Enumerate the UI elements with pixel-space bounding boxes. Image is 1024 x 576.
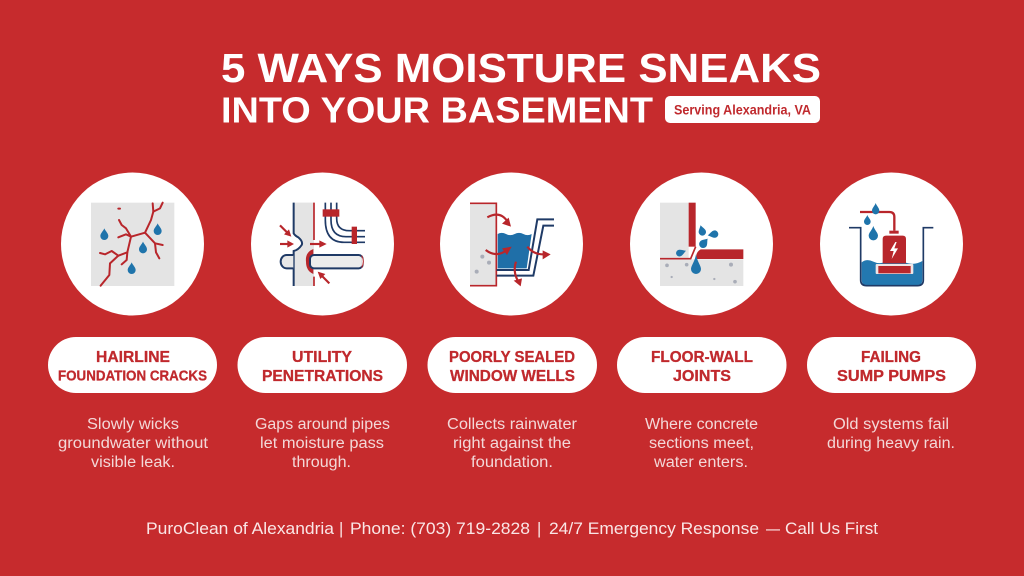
label pill: utility penetrations: PENETRATIONS (262, 368, 383, 385)
label pill: poorly sealed window wells (428, 337, 597, 393)
icon: sump pump in basin (820, 172, 963, 316)
description: hairline foundation cracks: visible leak. (91, 454, 175, 471)
panel: floor-wall joints (617, 172, 786, 471)
footer contact line: | (339, 520, 343, 538)
description: hairline foundation cracks: Slowly wicks (87, 416, 179, 433)
location badge (665, 96, 820, 123)
footer contact line: Phone: (703) 719-2828 (350, 520, 530, 538)
description: poorly sealed window wells: Collects rainwater (447, 416, 577, 433)
footer contact line: Call Us First (785, 520, 878, 538)
icon: cracked wall with drops (61, 172, 204, 316)
description: utility penetrations (255, 416, 390, 471)
panel: utility penetrations (238, 172, 407, 471)
icon: pipes through wall (251, 172, 394, 316)
title: 5 WAYS MOISTURE SNEAKS (221, 45, 821, 91)
label pill: poorly sealed window wells: POORLY SEALED (449, 349, 575, 366)
description: hairline foundation cracks (58, 416, 209, 471)
label pill: failing sump pumps: FAILING (861, 349, 921, 366)
footer contact line: | (537, 520, 541, 538)
footer contact line: PuroClean of Alexandria (146, 520, 335, 538)
label pill: floor-wall joints: JOINTS (673, 368, 731, 385)
description: utility penetrations: let moisture pass (260, 435, 384, 452)
label pill: poorly sealed window wells: WINDOW WELLS (450, 368, 575, 385)
label pill: hairline foundation cracks: FOUNDATION CRACKS (58, 368, 207, 384)
label pill: failing sump pumps (807, 337, 976, 393)
description: poorly sealed window wells (447, 416, 577, 471)
title: INTO YOUR BASEMENT (221, 90, 653, 130)
label pill: hairline foundation cracks (48, 337, 217, 393)
description: poorly sealed window wells: foundation. (471, 454, 553, 471)
label pill: floor-wall joints: FLOOR-WALL (651, 349, 753, 366)
icon: flooded window well (440, 172, 583, 316)
description: failing sump pumps: during heavy rain. (827, 435, 955, 452)
panel: hairline foundation cracks (48, 172, 217, 471)
footer contact line: — (766, 520, 780, 538)
label pill: floor-wall joints (617, 337, 786, 393)
description: failing sump pumps: Old systems fail (833, 416, 949, 433)
label pill: utility penetrations: UTILITY (292, 349, 352, 366)
description: floor-wall joints: Where concrete (645, 416, 758, 433)
description: floor-wall joints: water enters. (653, 454, 748, 471)
description: failing sump pumps (827, 416, 955, 452)
title (221, 45, 821, 130)
description: utility penetrations: Gaps around pipes (255, 416, 390, 433)
location badge: Serving Alexandria, VA (674, 102, 811, 118)
footer contact line (146, 520, 878, 538)
label pill: failing sump pumps: SUMP PUMPS (837, 368, 946, 385)
footer contact line: 24/7 Emergency Response (549, 520, 759, 538)
description: floor-wall joints: sections meet, (649, 435, 754, 452)
description: hairline foundation cracks: groundwater without (58, 435, 209, 452)
label pill: utility penetrations (238, 337, 407, 393)
description: utility penetrations: through. (292, 454, 351, 471)
label pill: hairline foundation cracks: HAIRLINE (96, 349, 170, 366)
panel: failing sump pumps (807, 172, 976, 452)
panel: poorly sealed window wells (428, 172, 597, 471)
description: poorly sealed window wells: right against the (453, 435, 571, 452)
icon: floor-wall joint leak (630, 172, 773, 316)
description: floor-wall joints (645, 416, 758, 471)
